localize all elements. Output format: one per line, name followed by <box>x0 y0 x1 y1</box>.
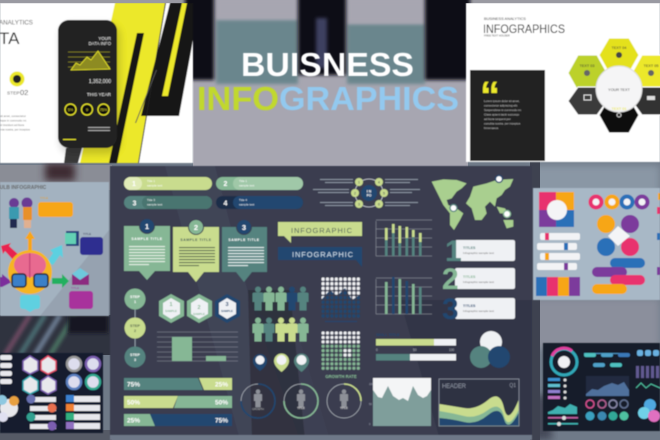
ring charts <box>67 357 100 389</box>
phone mockup: THIS YEAR <box>87 92 112 97</box>
panel: colourful infographic sampler right <box>533 188 660 300</box>
percent bar rows: 25% <box>215 382 228 388</box>
ribbon list <box>66 395 100 429</box>
quote box: Lorem ipsum dolor sit amet, <box>484 99 520 103</box>
hexagon ring: TEXT 05 <box>644 64 658 68</box>
quote box: himenaeos. <box>484 126 499 130</box>
titles card 2 <box>442 263 515 296</box>
radial info diagram: 4 <box>378 180 380 184</box>
sample card 2: SAMPLE TITLE <box>180 238 212 242</box>
step icon <box>7 72 28 97</box>
titles card 1: 1 <box>445 235 462 268</box>
skill progress bars: SKILL TITLE <box>376 332 400 337</box>
sample card 1 <box>124 218 170 280</box>
hexagon badges: 3 <box>225 302 229 308</box>
area chart: 50 <box>369 403 372 406</box>
streaky band under bulb panel <box>0 315 112 355</box>
petal diagram <box>0 395 19 422</box>
banner: infographic light <box>278 222 362 243</box>
blue callout: TITLE <box>83 232 91 236</box>
title pills row: Title 4 <box>239 198 247 202</box>
skill progress bars: 50 <box>413 348 417 352</box>
dot matrix: growth rate <box>321 331 361 379</box>
area chart: 100 <box>369 383 374 386</box>
sample card 3: 3 <box>242 223 246 232</box>
titles card 3: TITLES <box>463 304 476 308</box>
sample card 1: 1 <box>145 222 149 231</box>
titles card 1: TITLES <box>463 246 476 250</box>
hexagon ring: YOUR TEXT <box>608 88 631 92</box>
lightbulb with brain <box>8 250 52 312</box>
step icon: 02 <box>20 88 28 97</box>
step flow <box>124 288 146 368</box>
hexagon ring: TEXT 01 <box>612 107 626 111</box>
phone stat circles: 5% <box>68 108 74 112</box>
title pills row: 4 <box>224 200 228 208</box>
step flow: STEP <box>130 324 140 328</box>
step flow: STEP <box>130 295 140 299</box>
sliders <box>548 416 578 426</box>
characters <box>9 198 32 228</box>
radial info diagram: 6 <box>378 202 380 206</box>
sample card 1: SAMPLE TITLE <box>131 237 163 241</box>
phone mockup <box>58 20 120 154</box>
radial info diagram <box>313 178 420 208</box>
clover diagram <box>597 215 639 256</box>
quote box: conubia nostra, per inceptos <box>484 122 521 126</box>
skill progress bars <box>376 332 456 360</box>
sample card 2 <box>173 220 219 282</box>
magenta callout: TITLE <box>71 286 79 290</box>
pin markers <box>253 354 309 372</box>
person ring 2 <box>284 384 318 418</box>
banner: infographic navy <box>278 247 362 267</box>
slide body text: sit amet, consectetur <box>0 114 26 118</box>
quote box: Class aptent taciti sociosqu <box>484 112 519 116</box>
column chart <box>157 332 238 361</box>
square wheel <box>539 192 574 227</box>
icon list <box>26 394 56 430</box>
phone stat circles: 9 <box>86 108 88 112</box>
percent bar rows: 75% <box>127 382 140 388</box>
title: BUISNESS INFOGRAPHICS: GRAPHICS <box>279 80 459 117</box>
quote box: Suspendisse in commodo mi. <box>484 108 522 112</box>
percent bar rows <box>124 378 232 426</box>
step flow: 2 <box>134 329 136 333</box>
slide body text: mia nostra, per inceptos <box>0 128 30 132</box>
hexagon badges: 2 <box>197 305 201 311</box>
panel: hexagon infographics slide <box>466 3 660 162</box>
banner: infographic navy: INFOGRAPHIC <box>292 250 354 259</box>
slide heading: INFOGRAPHICS <box>483 22 565 36</box>
quote box: “ <box>480 74 500 118</box>
orange callout: TITLE <box>40 196 48 200</box>
phone stat circles: 75% <box>100 108 108 112</box>
panel: central infographic board <box>110 166 532 440</box>
percent bar rows: 50% <box>127 400 140 406</box>
step flow: 1 <box>134 300 136 304</box>
petals <box>638 399 660 422</box>
person ring 2: TITLE <box>297 406 305 410</box>
area chart <box>548 404 577 414</box>
slide body text: id tincidunt ad litora <box>0 123 25 127</box>
title pills row: 1 <box>132 181 136 188</box>
snake timeline <box>592 258 645 294</box>
yellow diagonal band <box>80 3 165 163</box>
hexagon ring: TEXT 04 <box>612 46 626 50</box>
titles card 3 <box>442 293 515 326</box>
step icon: STEP <box>7 90 20 96</box>
dot matrix: growth rate: GROWTH RATE <box>325 374 357 379</box>
header wave chart: Q1 <box>509 383 516 389</box>
header wave chart <box>439 379 519 426</box>
radial info diagram: 2 <box>354 192 356 196</box>
hexagon ring: TEXT 03 <box>580 64 594 68</box>
slide body text <box>0 114 30 132</box>
person ring 3: TITLE <box>340 406 348 410</box>
dot matrix: mountain <box>321 277 361 322</box>
blue device icon <box>65 231 79 246</box>
radial info diagram: 5 <box>383 192 385 196</box>
radial info diagram: 3 <box>358 202 360 206</box>
skill progress bars: 100 <box>449 348 455 352</box>
right edge tabs <box>657 193 660 275</box>
quote box: ad litora torquent per <box>484 117 511 121</box>
title pills row: Title 3 <box>147 198 155 202</box>
red arrow <box>1 243 20 262</box>
title pills row: Title 1 <box>239 179 247 183</box>
title pills row: 3 <box>133 200 137 208</box>
slide heading: ANALYTICS <box>0 20 33 26</box>
hexagon ring <box>568 38 660 133</box>
node row and bars <box>636 350 660 388</box>
title pills row: 2 <box>224 181 228 188</box>
phone mockup: 1,352,000 <box>89 79 111 85</box>
percent bar rows: 25% <box>127 418 140 424</box>
arrow list <box>548 378 566 400</box>
slide heading: FREE TEXT HOLDER <box>484 34 510 38</box>
person ring 3 <box>327 384 361 418</box>
title pills row: sample text <box>239 184 255 188</box>
person ring 1 <box>241 384 275 418</box>
world map <box>432 176 513 230</box>
percent bar rows: 75% <box>215 418 228 424</box>
radial info diagram: I N <box>367 190 372 194</box>
title pills row: sample text <box>147 184 163 188</box>
title pills row: sample text <box>239 202 255 206</box>
quote box <box>470 70 545 161</box>
phone mockup: DATA INFO <box>88 41 112 46</box>
purple arrow <box>0 274 12 287</box>
skill progress bars: 0 <box>376 348 378 352</box>
titles card 3: Infographic sample text <box>463 309 494 313</box>
titles card 2: TITLES <box>463 275 476 279</box>
list labels <box>0 355 12 384</box>
panel: bulb infographic <box>0 182 109 316</box>
people pictograms <box>252 286 308 342</box>
person ring 1: GROWTH <box>252 407 264 411</box>
titles card 3: 3 <box>442 293 459 326</box>
green arrow <box>52 274 69 288</box>
area chart: 0 <box>369 423 371 426</box>
envelope icon <box>72 268 89 285</box>
titles card 1 <box>445 235 515 268</box>
hexagon badges: SAMPLE <box>165 309 177 313</box>
header wave chart: HEADER <box>442 384 467 390</box>
titles card 2: Infographic sample text <box>463 280 494 284</box>
step flow: STEP <box>130 353 140 357</box>
step flow: 3 <box>134 358 136 362</box>
sample card 2: 2 <box>194 223 198 232</box>
slide body text: bque in commodo mi. <box>0 118 27 122</box>
bar chart: yellow on teal <box>376 220 432 256</box>
slide heading: BUSINESS ANALYTICS <box>484 16 526 21</box>
arrow list <box>537 233 580 270</box>
radial info diagram: FO <box>367 194 372 198</box>
tab blocks <box>536 277 580 296</box>
title pills row <box>124 177 303 209</box>
radial info diagram: 1 <box>358 180 360 184</box>
title pills row: Title 1 <box>147 179 155 183</box>
title pills row: sample text <box>147 202 163 206</box>
sample card 3: SAMPLE TITLE <box>228 238 260 242</box>
radial chart <box>551 348 577 375</box>
sample card 3 <box>222 220 267 282</box>
phone mockup: YOUR <box>98 36 111 41</box>
titles card 1: Infographic sample text <box>463 251 494 255</box>
title: BUISNESS INFOGRAPHICS: BUISNESS <box>241 46 414 83</box>
quote box: consectetur adipiscing elit. <box>484 104 518 108</box>
pie row <box>586 412 628 420</box>
area chart <box>369 378 431 426</box>
hexagon badges: SAMPLE <box>221 309 233 313</box>
bar chart: navy and green <box>376 277 432 314</box>
percent bar rows: 50% <box>215 400 228 406</box>
line graph <box>586 376 629 396</box>
cyan arrow <box>47 245 63 265</box>
phone stat circles <box>65 104 109 115</box>
panel: dark infographic sampler bottom left <box>0 353 103 433</box>
panel: dark dashboard sampler right <box>543 343 660 431</box>
titles card 2: 2 <box>442 263 459 296</box>
title: BUISNESS INFOGRAPHICS <box>197 46 459 117</box>
slide heading <box>483 16 565 38</box>
panel: phone analytics slide <box>0 3 193 163</box>
bead chain <box>590 196 648 208</box>
hexagon cluster <box>23 356 56 394</box>
banner: infographic light: INFOGRAPHIC <box>291 226 353 235</box>
hexagon badges: SAMPLE <box>193 312 205 316</box>
venn circles <box>470 331 510 368</box>
ring row <box>586 400 628 408</box>
phone area chart <box>71 51 110 70</box>
hexagon badges: 1 <box>169 302 173 308</box>
timeline <box>584 353 630 367</box>
hexagon badges <box>159 294 240 323</box>
title: BUISNESS INFOGRAPHICS: INFO <box>197 80 279 117</box>
up arrow <box>25 231 35 256</box>
